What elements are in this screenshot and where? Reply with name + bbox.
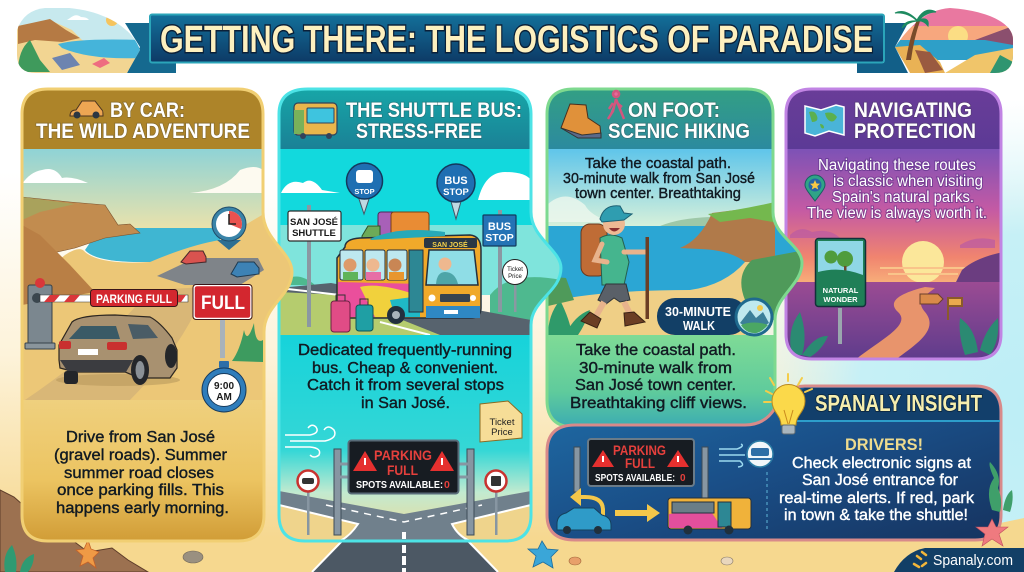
text block: drivers: in town & take the shuttle! — [784, 507, 968, 524]
text block: on foot bottom: Take the coastal path. — [576, 342, 736, 359]
vignette: right sunset and palm — [890, 8, 1015, 73]
vignette: left beach — [17, 8, 142, 73]
illustration: hiker — [581, 206, 649, 328]
text block: navigating: is classic when visiting — [833, 173, 983, 190]
ticket price round sign — [502, 260, 528, 312]
ribbon tails — [125, 23, 176, 73]
shirt — [600, 235, 629, 285]
panel border — [22, 89, 292, 541]
palm tree — [906, 20, 920, 60]
distant hill — [280, 276, 561, 320]
panel: on foot — [545, 87, 805, 430]
parking lot — [157, 258, 264, 285]
text block: drivers: DRIVERS! — [845, 436, 923, 454]
heading: on foot — [608, 99, 750, 143]
natural wonder sign: NATURAL — [823, 286, 859, 295]
legs — [598, 284, 630, 304]
icon: traffic circle — [747, 441, 773, 467]
parking barrier — [25, 278, 188, 349]
header strip — [788, 388, 999, 421]
san jose shuttle sign — [288, 205, 341, 327]
luggage: suitcases — [331, 295, 373, 332]
bus stop road sign — [483, 210, 516, 312]
text block: shuttle: Dedicated frequently-running — [298, 342, 512, 359]
electronic parking sign: SPOTS AVAILABLE: — [595, 473, 675, 484]
illustration: SUV — [56, 315, 180, 386]
signposts — [920, 294, 943, 304]
icon: blue car — [557, 508, 611, 534]
pebble — [183, 551, 203, 563]
icon: bus — [294, 103, 337, 139]
cliffs — [680, 205, 775, 262]
stop pin — [346, 163, 382, 214]
text block: by car: once parking fills. This — [57, 482, 224, 499]
footer brand: spanaly.com — [894, 548, 1024, 572]
heading: on foot: ON FOOT: — [628, 99, 720, 122]
text block: on foot bottom — [570, 342, 747, 412]
bus road sign — [486, 470, 506, 535]
icon: u-turn arrow — [578, 497, 603, 516]
text block: on foot top: 30-minute walk from San José — [563, 171, 755, 187]
bus stop pin — [437, 164, 475, 219]
icon: location pin with star — [805, 175, 825, 201]
heading: navigating protection — [854, 99, 976, 143]
panel header — [280, 90, 530, 149]
parking full label: PARKING FULL — [96, 294, 172, 306]
no-car road sign — [298, 470, 318, 535]
sky — [24, 149, 262, 228]
text block: drivers: Check electronic signs at — [792, 455, 972, 472]
starfish: orange — [76, 540, 99, 568]
text block: on foot bottom: San José town center. — [575, 377, 736, 394]
cliffs — [24, 196, 141, 252]
electronic parking sign: PARKING — [374, 447, 432, 463]
panel: spanaly insight — [547, 374, 1001, 540]
heading: navigating protection: NAVIGATING — [854, 99, 972, 122]
natural wonder sign — [816, 238, 866, 344]
text block: navigating — [807, 157, 987, 222]
roof stripe — [370, 230, 445, 240]
heading: shuttle — [346, 99, 522, 143]
text block: on foot top: Take the coastal path. — [585, 156, 731, 172]
electronic parking sign: FULL — [625, 456, 655, 471]
parking full label — [90, 290, 178, 306]
icon: walker — [608, 91, 624, 119]
icon: wind — [719, 444, 745, 467]
left plants — [548, 300, 590, 335]
sand ground — [22, 215, 295, 400]
text block: on foot top — [563, 156, 755, 202]
text block: shuttle — [298, 342, 512, 412]
heading: shuttle: THE SHUTTLE BUS: — [346, 99, 522, 122]
panel header — [24, 90, 262, 149]
text block: by car: Drive from San José — [66, 429, 215, 446]
crossroads ground — [280, 506, 530, 538]
bus front — [424, 238, 477, 248]
sky — [280, 149, 532, 225]
road continuing out of the panel — [312, 541, 498, 572]
panel: shuttle bus — [277, 87, 567, 545]
sea — [85, 228, 220, 262]
text block: by car: (gravel roads). Summer — [54, 447, 227, 464]
icon: car — [70, 101, 103, 118]
electronic parking sign — [334, 440, 474, 535]
text block: by car: summer road closes — [64, 465, 214, 482]
bus stop pin: BUS — [444, 175, 468, 187]
illustration: shuttle bus — [337, 212, 481, 324]
bus body — [337, 235, 481, 318]
icon: map — [805, 105, 844, 136]
icon: small bus — [668, 498, 751, 534]
pole — [646, 237, 649, 319]
text block: navigating: The view is always worth it. — [807, 205, 987, 222]
heading: navigating protection: PROTECTION — [854, 120, 976, 143]
plant — [232, 323, 263, 362]
rocks bottom-left — [0, 490, 148, 572]
text block: navigating: Spain's natural parks. — [832, 189, 974, 206]
winding road — [855, 287, 935, 360]
boots — [581, 312, 601, 328]
footer brand: spanaly.com: Spanaly.com — [933, 552, 1013, 569]
backpack — [581, 224, 607, 276]
full road sign — [193, 284, 252, 358]
panel border — [279, 89, 561, 541]
badge: 30-minute walk — [657, 298, 772, 335]
wheel — [387, 306, 405, 324]
text block: shuttle: in San José. — [361, 395, 450, 412]
decoration: seaweed and pink starfish — [976, 462, 1013, 546]
passenger windows — [340, 250, 363, 280]
electronic parking sign: 0 — [444, 479, 450, 491]
stopwatch 9:00 AM: AM — [216, 392, 232, 403]
head and hat — [603, 213, 625, 235]
electronic parking sign: PARKING — [613, 443, 666, 458]
arms — [624, 250, 645, 254]
clock location pin — [212, 207, 246, 250]
lower panel — [280, 335, 530, 514]
bus stop pin: STOP — [443, 187, 470, 198]
panel body — [547, 386, 1001, 540]
text block: by car: happens early morning. — [56, 500, 229, 517]
icon: wind — [285, 425, 335, 457]
panel: navigating protection — [785, 87, 1003, 360]
badge: 30-minute walk: 30-MINUTE — [665, 304, 731, 319]
text block: navigating: Navigating these routes — [818, 157, 976, 174]
text block: shuttle: bus. Cheap & convenient. — [312, 360, 498, 377]
icon: ticket price card: Price — [491, 427, 513, 438]
lower panel — [548, 335, 774, 424]
title banner — [125, 14, 908, 73]
sunset sky — [785, 149, 1003, 284]
stopwatch 9:00 AM: 9:00 — [214, 381, 234, 392]
electronic parking sign: 0 — [680, 473, 686, 484]
heading: shuttle: STRESS-FREE — [356, 120, 482, 143]
ticket price round sign: Price — [508, 274, 522, 280]
stop pin: STOP — [354, 187, 375, 196]
heading: by car: BY CAR: — [110, 99, 185, 122]
luggage on roof — [378, 212, 395, 238]
arrow: car to bus — [615, 504, 660, 522]
heading: insight: SPANALY INSIGHT — [815, 390, 982, 416]
passengers — [344, 258, 356, 272]
beach — [547, 262, 760, 335]
heading: on foot: SCENIC HIKING — [608, 120, 750, 143]
text block: shuttle: Catch it from several stops — [307, 377, 504, 394]
text block: drivers: real-time alerts. If red, park — [779, 490, 974, 507]
banner body — [150, 14, 884, 62]
sea — [548, 226, 796, 298]
illustration: shuttle bus: SAN JOSÉ — [432, 240, 468, 249]
icon: light bulb — [764, 374, 812, 434]
panel header — [785, 87, 1003, 149]
sandy track — [26, 288, 192, 400]
icon: ticket price card: Ticket — [490, 417, 515, 428]
sky — [548, 149, 772, 226]
bus stop road sign: STOP — [485, 232, 514, 244]
electronic parking sign: FULL — [387, 462, 418, 478]
text block: on foot top: town center. Breathtaking — [575, 186, 741, 202]
electronic parking sign — [574, 439, 708, 502]
icon: ticket price card — [480, 401, 522, 442]
text block: on foot bottom: Breathtaking cliff views. — [570, 395, 747, 412]
plants — [790, 312, 828, 357]
panel border — [547, 89, 802, 427]
text block: by car — [54, 429, 229, 517]
text block: drivers: San José entrance for — [802, 472, 958, 489]
text block: drivers — [779, 436, 974, 524]
plant bottom-left — [4, 545, 34, 572]
san jose shuttle sign: SAN JOSÉ — [290, 217, 338, 228]
full road sign: FULL — [201, 293, 245, 314]
parked cars — [181, 251, 206, 264]
road and verge — [279, 283, 531, 335]
electronic parking sign: SPOTS AVAILABLE: — [356, 479, 443, 491]
beach foreground decorations — [0, 490, 733, 572]
panel border — [786, 89, 1001, 359]
heading: by car — [36, 99, 250, 143]
bus stop road sign: BUS — [488, 221, 511, 233]
panel header — [548, 90, 772, 149]
badge: 30-minute walk: WALK — [683, 318, 716, 333]
text block: on foot bottom: 30-minute walk from — [579, 360, 732, 377]
san jose shuttle sign: SHUTTLE — [292, 228, 336, 239]
stopwatch 9:00 AM — [202, 361, 246, 412]
icon: hiking boot — [561, 104, 601, 138]
heading: by car: THE WILD ADVENTURE — [36, 120, 250, 143]
panel: by car — [20, 87, 295, 545]
heading: GETTING THERE: THE LOGISTICS OF PARADISE — [160, 19, 873, 61]
ticket price round sign: Ticket — [507, 267, 523, 273]
starfish: blue — [528, 541, 558, 568]
natural wonder sign: WONDER — [823, 295, 858, 304]
